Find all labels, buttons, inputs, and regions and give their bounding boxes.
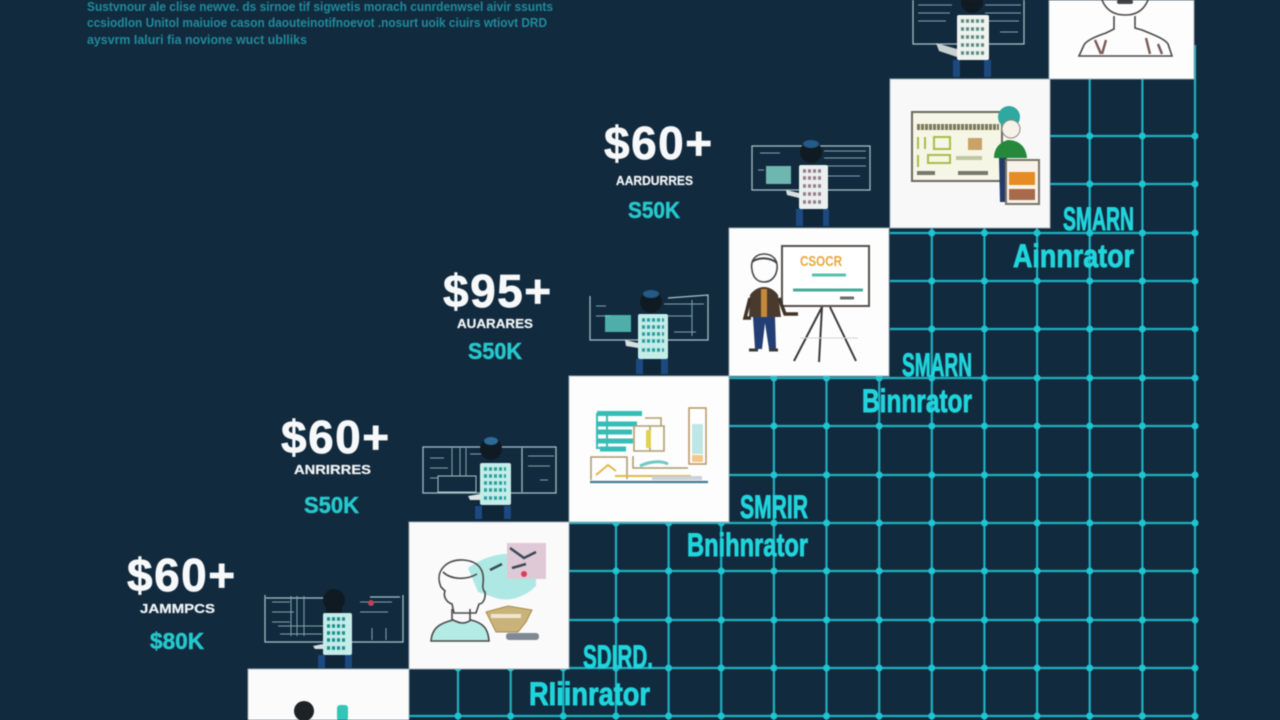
salary block 3: S50K <box>468 338 522 364</box>
salary block 3: AUARARES <box>457 316 533 331</box>
role label 1: SDIRD. <box>583 639 653 675</box>
salary block 4: AARDURRES <box>616 173 693 188</box>
role label 2: SMRIR <box>740 489 808 525</box>
staircase grid <box>409 45 1197 720</box>
step card 2: thinking person <box>409 522 569 669</box>
role label 2: Bnihnrator <box>687 527 808 563</box>
intro paragraph: ccsiodlon Unitol maiuioe cason daouteinotifnoevot .nosurt uoik ciuirs wtiovt DRD <box>87 16 547 30</box>
salary block 4: $60+ <box>604 117 714 169</box>
developer figure 5 at screen <box>913 0 1024 77</box>
salary block 3: $95+ <box>443 265 553 317</box>
developer figure 2 at screen <box>423 437 556 520</box>
step card 3: technical plan sketch <box>569 376 729 522</box>
developer figure 4 at screen <box>752 140 870 226</box>
salary block 4 <box>604 117 714 223</box>
step card 4: presenter with easel <box>729 228 889 376</box>
salary block 1: JAMMPCS <box>140 601 215 616</box>
intro paragraph <box>87 0 553 47</box>
role label 3 <box>862 347 972 419</box>
role label 2 <box>687 489 808 563</box>
developer figure 3 at screen <box>590 290 708 374</box>
step card 4: presenter with easel: CSOCR <box>800 253 842 270</box>
salary block 1 <box>127 549 237 654</box>
step card 5: teacher at whiteboard <box>890 79 1050 228</box>
salary block 2: S50K <box>304 492 359 518</box>
role label 4: Ainnrator <box>1013 238 1134 274</box>
salary block 2 <box>281 411 391 518</box>
intro paragraph: aysvrm Ialuri fia novione wuct ublliks <box>87 33 307 47</box>
intro paragraph: Sustvnour ale clise newve. ds sirnoe tif sigwetis morach cunrdenwsel aivir ssunts <box>87 0 553 14</box>
step card 6: portrait <box>1049 0 1194 79</box>
salary block 2: $60+ <box>281 411 391 463</box>
role label 1 <box>529 639 653 712</box>
salary block 3 <box>443 265 553 364</box>
salary block 2: ANRIRRES <box>294 462 371 477</box>
salary block 4: S50K <box>628 197 680 223</box>
role label 1: RIiinrator <box>529 676 650 712</box>
role label 4: SMARN <box>1063 201 1134 237</box>
role label 3: Binnrator <box>862 383 972 419</box>
step card 1 <box>248 669 409 720</box>
role label 4 <box>1013 201 1134 274</box>
salary block 1: $80K <box>150 628 204 654</box>
developer figure 1 at screen <box>265 589 403 668</box>
role label 3: SMARN <box>902 347 972 383</box>
salary block 1: $60+ <box>127 549 237 601</box>
